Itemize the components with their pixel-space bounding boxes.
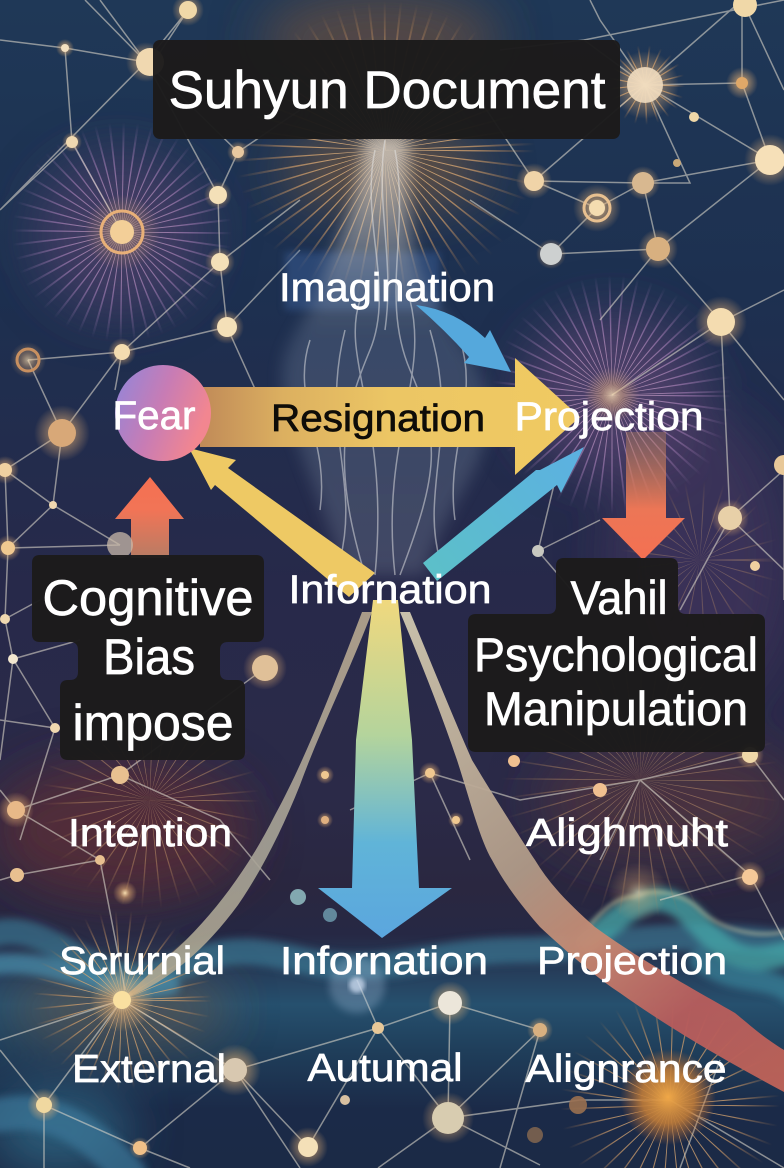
arrow: information to fear [189,448,375,597]
label: scrurnial: Scrurnial [59,940,225,983]
label: resignation: Resignation [271,398,485,440]
callout: cognitive bias impose: Cognitive [42,570,254,626]
label: alignrance: Alignrance [526,1048,726,1091]
callout: cognitive bias impose [32,555,264,760]
title [153,40,620,139]
callout: vahil psychological manipulation: Psychological [474,628,758,681]
callout: vahil psychological manipulation [468,558,765,752]
band arrows from Information [120,600,784,1092]
label: external: External [72,1048,226,1091]
callout: vahil psychological manipulation: Vahil [570,571,668,624]
arrow: centre down [318,600,452,938]
blue haze band behind imagination [285,252,440,310]
arrow: left sweep [120,612,372,1000]
arrow: information to projection [423,447,584,581]
callout: cognitive bias impose: Bias [103,629,195,685]
label: autumal: Autumal [308,1047,462,1090]
callout: vahil psychological manipulation: Manipulation [484,682,748,735]
fear circle [115,365,211,461]
callout: cognitive bias impose: impose [72,695,234,751]
arrow: imagination to projection [416,305,511,372]
label: imagination: Imagination [279,266,495,310]
label: fear: Fear [112,394,196,438]
teal waves [0,892,784,1168]
label: projection: Projection [514,395,704,439]
title: Suhyun Document [168,61,606,120]
label: information centre: Infornation [288,568,492,612]
label: intention: Intention [68,812,232,855]
central smoke plume [282,135,490,575]
arrow: up to fear [115,477,184,558]
arrow: right sweep [400,612,784,1092]
arrow: projection to manipulation [602,432,685,560]
arrow: main resignation [200,358,580,475]
label: information lower: Infornation [280,940,488,983]
label: projection lower: Projection [537,940,727,983]
label: alighmuht: Alighmuht [526,812,728,855]
